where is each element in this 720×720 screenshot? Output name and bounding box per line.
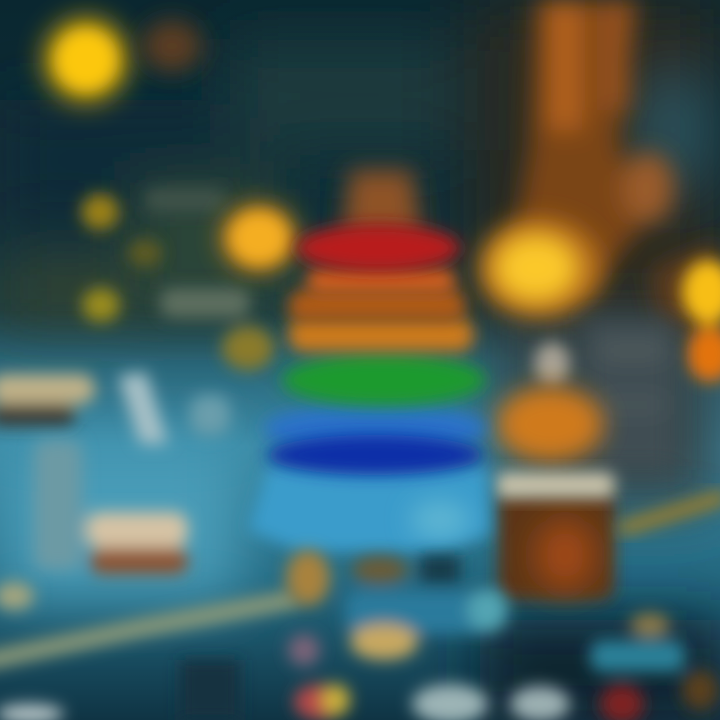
- tower top knob: [342, 170, 422, 235]
- rainbow tower: [248, 170, 490, 552]
- blue layers: [263, 404, 487, 452]
- icon: right central glowing lamp: [478, 218, 602, 318]
- lower center objects: [180, 550, 508, 720]
- left table dish: [0, 372, 230, 444]
- bottom colorful objects: [0, 582, 718, 720]
- orange jar on right: [496, 386, 604, 462]
- diagonal gold band right: [625, 498, 720, 528]
- left glass and bowl: [34, 440, 188, 574]
- right side grey machinery: [585, 320, 675, 470]
- icon: dim orange orb: [142, 20, 202, 72]
- icon: right edge glowing lamps: [682, 260, 720, 382]
- pale cap above orange jar: [534, 342, 570, 386]
- icon: center left orange orb: [219, 202, 299, 274]
- copper tower top right: [505, 0, 720, 340]
- small left yellow lights: [81, 188, 274, 370]
- icon: top left yellow glowing orb: [40, 14, 132, 106]
- skirt pale patch: [410, 500, 470, 540]
- red layer: [296, 224, 460, 272]
- diagonal gold band left: [0, 600, 290, 660]
- brown jar on right: [495, 472, 615, 600]
- orange layers: [288, 318, 474, 352]
- light blue skirt: [248, 465, 490, 552]
- green layer: [282, 354, 486, 406]
